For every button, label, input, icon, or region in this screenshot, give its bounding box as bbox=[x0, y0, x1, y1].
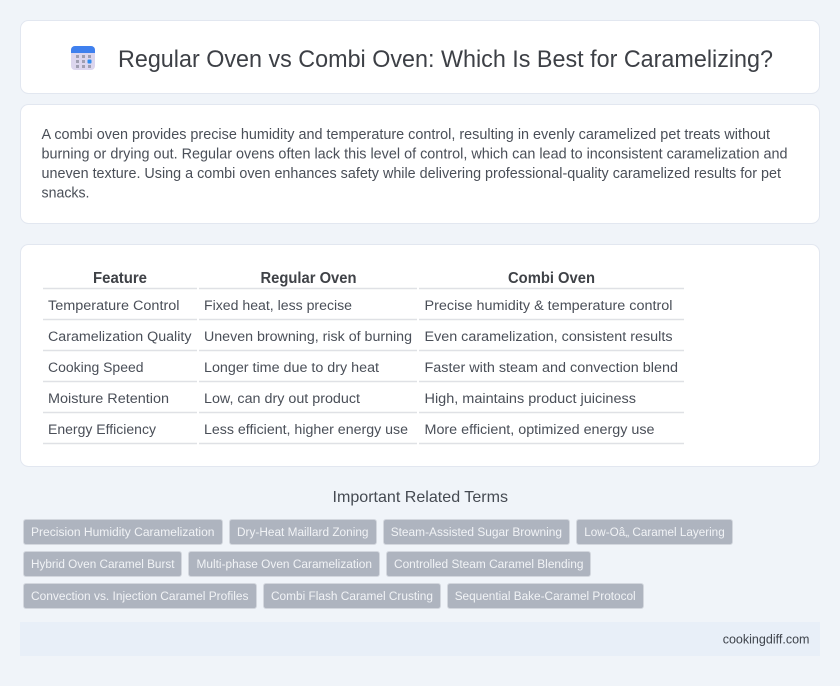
row: cooking speed: Longer time due to dry heat bbox=[204, 360, 379, 376]
table header: Combi Oven bbox=[508, 270, 595, 287]
tag bbox=[448, 584, 644, 608]
row: cooking speed: Cooking Speed bbox=[48, 360, 144, 376]
tag bbox=[230, 520, 376, 544]
row: caramelization quality: Caramelization Quality bbox=[48, 329, 192, 345]
footer bbox=[20, 622, 820, 656]
row: caramelization quality: Uneven browning, risk of burning bbox=[204, 329, 412, 345]
footer: cookingdiff.com bbox=[723, 632, 810, 646]
row: moisture retention: Moisture Retention bbox=[48, 391, 169, 407]
row: temperature control bbox=[48, 298, 672, 314]
tag: Sequential Bake-Caramel Protocol bbox=[455, 589, 636, 603]
table header: Regular Oven bbox=[260, 270, 356, 287]
row: temperature control: Temperature Control bbox=[48, 298, 180, 314]
row: moisture retention: High, maintains product juiciness bbox=[424, 391, 636, 407]
row: temperature control: Precise humidity & temperature control bbox=[424, 298, 672, 314]
text block: summary: snacks. bbox=[42, 186, 90, 202]
panel: comparison table bbox=[20, 244, 820, 466]
tag: Combi Flash Caramel Crusting bbox=[271, 589, 433, 603]
tag bbox=[576, 520, 732, 544]
tag: Convection vs. Injection Caramel Profiles bbox=[31, 589, 248, 603]
row: energy efficiency: Energy Efficiency bbox=[48, 422, 157, 438]
table header: Feature bbox=[93, 270, 147, 287]
tag bbox=[386, 552, 590, 576]
related terms tags bbox=[24, 520, 732, 608]
tag bbox=[188, 552, 380, 576]
row: caramelization quality bbox=[48, 329, 672, 345]
row: energy efficiency bbox=[48, 422, 655, 438]
tag bbox=[264, 584, 440, 608]
tag bbox=[24, 584, 256, 608]
panel: summary paragraph bbox=[20, 104, 820, 224]
text block: summary bbox=[42, 127, 788, 202]
row: energy efficiency: Less efficient, higher energy use bbox=[204, 422, 408, 438]
table header bbox=[93, 270, 595, 287]
row: moisture retention: Low, can dry out product bbox=[204, 391, 360, 407]
row: temperature control: Fixed heat, less precise bbox=[204, 298, 352, 314]
tag: Multi-phase Oven Caramelization bbox=[196, 557, 372, 571]
tag: Steam-Assisted Sugar Browning bbox=[391, 525, 562, 539]
row: cooking speed: Faster with steam and convection blend bbox=[424, 360, 678, 376]
row: cooking speed bbox=[48, 360, 678, 376]
icon: calendar bbox=[71, 46, 95, 70]
tag: Hybrid Oven Caramel Burst bbox=[31, 557, 175, 571]
text block: summary: burning or drying out. Regular ovens often lack this level of control, which can lead to inconsistent caramelization and bbox=[42, 146, 788, 162]
tag: Dry-Heat Maillard Zoning bbox=[237, 525, 369, 539]
panel: header bbox=[20, 20, 820, 94]
tag: Precision Humidity Caramelization bbox=[31, 525, 215, 539]
row: caramelization quality: Even caramelization, consistent results bbox=[424, 329, 672, 345]
tag: Low-Oâ„ Caramel Layering bbox=[584, 525, 725, 539]
text block: summary: uneven texture. Using a combi oven enhances safety while delivering professional-quality caramelized results for pet bbox=[42, 166, 781, 182]
row: moisture retention bbox=[48, 391, 636, 407]
tag bbox=[384, 520, 570, 544]
row: energy efficiency: More efficient, optimized energy use bbox=[424, 422, 655, 438]
tag bbox=[24, 520, 222, 544]
tag bbox=[24, 552, 182, 576]
tag: Controlled Steam Caramel Blending bbox=[394, 557, 584, 571]
heading: important related terms: Important Related Terms bbox=[332, 489, 508, 506]
text block: summary: A combi oven provides precise humidity and temperature control, resulting in evenly caramelized pet treats without bbox=[42, 127, 770, 143]
title: Regular Oven vs Combi Oven: Which Is Best for Caramelizing? bbox=[118, 46, 773, 73]
